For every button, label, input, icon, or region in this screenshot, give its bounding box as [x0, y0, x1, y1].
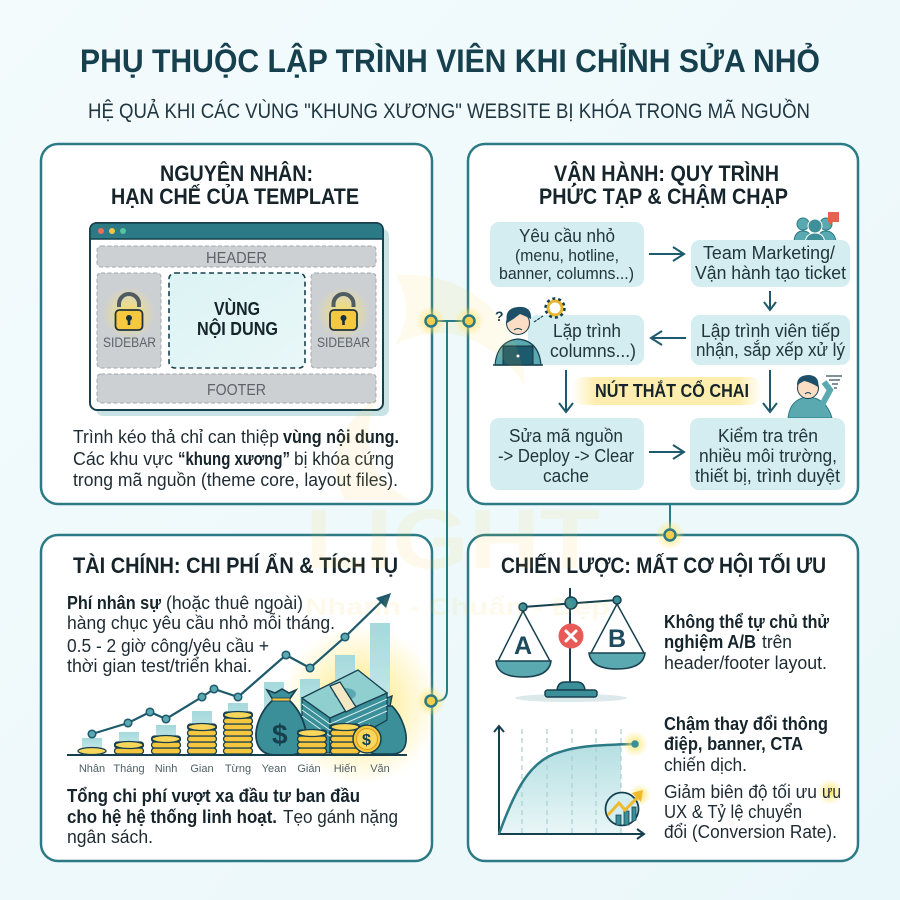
text: A/B testing: Không thể tự chủ thử: [664, 612, 830, 632]
header block: [97, 246, 376, 267]
axis labels: Hiến: [334, 763, 356, 775]
axis labels: [79, 763, 390, 775]
finance text top: Phí nhân sự: [67, 593, 162, 613]
content area: [169, 273, 305, 368]
header block: HEADER: [206, 250, 267, 267]
flow step: developer receives: nhận, sắp xếp xử lý: [696, 339, 845, 360]
right sidebar block: [311, 273, 376, 368]
title: PHỤ THUỘC LẬP TRÌNH VIÊN KHI CHỈNH SỬA NHỎ: [80, 43, 820, 79]
text: A/B testing: [664, 612, 830, 673]
heading: operations: VẬN HÀNH: QUY TRÌNH: [554, 161, 779, 186]
flow step: testing: thiết bị, trình duyệt: [695, 466, 840, 486]
watermark: [305, 275, 610, 621]
flow step: programming: columns...): [550, 341, 636, 361]
finance text top: [67, 593, 335, 676]
arrow: to test: [649, 445, 684, 459]
axis labels: Gián: [297, 763, 321, 775]
left sidebar block: SIDEBAR: [103, 334, 156, 350]
more coins: [298, 724, 360, 754]
footer block: FOOTER: [207, 382, 266, 399]
icon: stressed person: [788, 375, 842, 418]
icon: A/B balance scale: A: [514, 632, 532, 660]
flow step: fix source: Sửa mã nguồn: [509, 426, 623, 446]
plateau curve chart: [494, 726, 651, 839]
flow step: programming: [528, 315, 644, 365]
flow step: small request: banner, columns...): [499, 265, 634, 283]
bottleneck label: [572, 377, 762, 405]
icon: developer with laptop: ?: [495, 308, 504, 324]
cost growth chart: [67, 593, 440, 785]
panel: strategy: [468, 535, 858, 861]
flow step: developer receives: Lập trình viên tiếp: [701, 321, 840, 341]
axis: [67, 754, 407, 756]
text: slow change: đổi (Conversion Rate).: [664, 822, 837, 842]
icon: second money bag: [363, 696, 406, 754]
flow step: fix source: [490, 418, 644, 490]
icon: first money bag: $: [272, 719, 288, 750]
flow step: team ticket: Team Marketing/: [703, 243, 835, 263]
watermark: LIGHT: [305, 492, 600, 586]
text: slow change: điệp, banner, CTA: [664, 734, 803, 754]
flow step: small request: Yêu cầu nhỏ: [519, 226, 615, 246]
flow step: testing: Kiểm tra trên: [718, 426, 818, 446]
browser window diagram: [90, 223, 389, 416]
causes text: bị khóa cứng: [294, 449, 394, 469]
bars: [82, 623, 390, 755]
axis labels: Từng: [225, 763, 251, 775]
heading: strategy: CHIẾN LƯỢC: MẤT CƠ HỘI TỐI ƯU: [501, 552, 826, 578]
trend line: [88, 593, 391, 738]
text: A/B testing: header/footer layout.: [664, 653, 827, 673]
icon: developer with laptop: [493, 298, 564, 365]
icon: team: [794, 212, 839, 243]
text: slow change: chiến dịch.: [664, 755, 747, 775]
icon: large coin: [353, 725, 381, 753]
flow step: testing: nhiều môi trường,: [699, 446, 837, 466]
panel: finance: [41, 535, 440, 861]
arrow: to testing: [763, 370, 777, 412]
causes text: “khung xương”: [178, 449, 290, 469]
causes text: trong mã nguồn (theme core, layout files).: [73, 470, 398, 490]
connector: operations to strategy: [655, 504, 685, 550]
icon: A/B balance scale: B: [608, 625, 626, 653]
heading: operations: [539, 161, 788, 209]
text: slow change: ưu: [822, 782, 841, 802]
flow step: small request: (menu, hotline,: [515, 247, 619, 265]
arrow: to fix code: [559, 370, 573, 412]
finance text top: 0.5 - 2 giờ công/yêu cầu +: [67, 636, 269, 656]
text: slow change: UX & Tỷ lệ chuyển: [664, 802, 802, 822]
icon: stack of cash: [302, 670, 387, 753]
icon: first money bag: [256, 689, 306, 755]
axis labels: Gian: [190, 763, 214, 775]
axis labels: Yean: [262, 763, 286, 775]
causes text: Các khu vực: [73, 449, 173, 469]
finance text bottom: cho hệ hệ thống linh hoạt.: [67, 807, 277, 827]
heading: causes: [111, 161, 359, 209]
heading: finance: TÀI CHÍNH: CHI PHÍ ẨN & TÍCH TỤ: [73, 553, 398, 578]
text: slow change: Giảm biên độ tối ưu: [664, 782, 817, 802]
finance text bottom: ngân sách.: [67, 827, 153, 847]
finance text top: thời gian test/triển khai.: [67, 656, 252, 676]
flow step: programming: Lặp trình: [553, 321, 621, 341]
heading: causes: HẠN CHẾ CỦA TEMPLATE: [111, 184, 359, 209]
finance text top: (hoặc thuê ngoài): [166, 593, 303, 613]
content area: VÙNG: [214, 298, 260, 319]
causes text: vùng nội dung.: [283, 427, 399, 447]
watermark: Nhanh - Chuẩn - Đẹp: [305, 594, 610, 621]
content area: NỘI DUNG: [197, 318, 278, 339]
flow step: small request: [490, 222, 644, 287]
right sidebar block: SIDEBAR: [317, 334, 370, 350]
arrow: back to programming: [651, 331, 686, 345]
flow step: testing: [690, 418, 845, 490]
panel: operations: [468, 144, 858, 504]
axis labels: Nhân: [79, 763, 105, 775]
icon: A/B balance scale: [496, 588, 645, 702]
flow step: fix source: -> Deploy -> Clear: [498, 446, 634, 466]
finance text bottom: Tổng chi phí vượt xa đầu tư ban đầu: [67, 786, 360, 806]
text: slow change: Chậm thay đổi thông: [664, 714, 828, 734]
panel: causes: [41, 144, 432, 504]
heading: operations: PHỨC TẠP & CHẬM CHẠP: [539, 184, 788, 209]
axis labels: Văn: [370, 763, 390, 775]
flow step: fix source: cache: [543, 466, 589, 486]
icon: growth badge: [606, 784, 651, 826]
icon: large coin: $: [362, 732, 371, 749]
heading: causes: NGUYÊN NHÂN:: [160, 161, 313, 186]
finance text bottom: [67, 786, 398, 847]
arrow: to developer: [764, 291, 776, 310]
footer block: [97, 374, 376, 403]
arrow: to team: [649, 247, 684, 261]
connector: causes and finance to operations: [416, 306, 484, 716]
flow step: team ticket: Vận hành tạo ticket: [695, 263, 846, 283]
axis labels: Tháng: [113, 763, 145, 775]
causes text: [73, 427, 399, 490]
flow step: developer receives: [691, 315, 850, 365]
subtitle: HỆ QUẢ KHI CÁC VÙNG "KHUNG XƯƠNG" WEBSITE BỊ KHÓA TRONG MÃ NGUỒN: [88, 99, 810, 123]
causes text: Trình kéo thả chỉ can thiệp: [73, 427, 279, 447]
finance text bottom: Tẹo gánh nặng: [283, 807, 398, 827]
left sidebar block: [97, 273, 161, 368]
text: A/B testing: nghiệm A/B: [664, 632, 756, 652]
flow step: team ticket: [691, 240, 850, 287]
bottleneck label: NÚT THẮT CỔ CHAI: [595, 380, 749, 401]
axis labels: Ninh: [155, 763, 177, 775]
text: A/B testing: trên: [762, 632, 792, 652]
finance text top: hàng chục yêu cầu nhỏ mỗi tháng.: [67, 612, 335, 633]
coin stacks: [78, 712, 252, 754]
text: slow change: [664, 714, 843, 842]
